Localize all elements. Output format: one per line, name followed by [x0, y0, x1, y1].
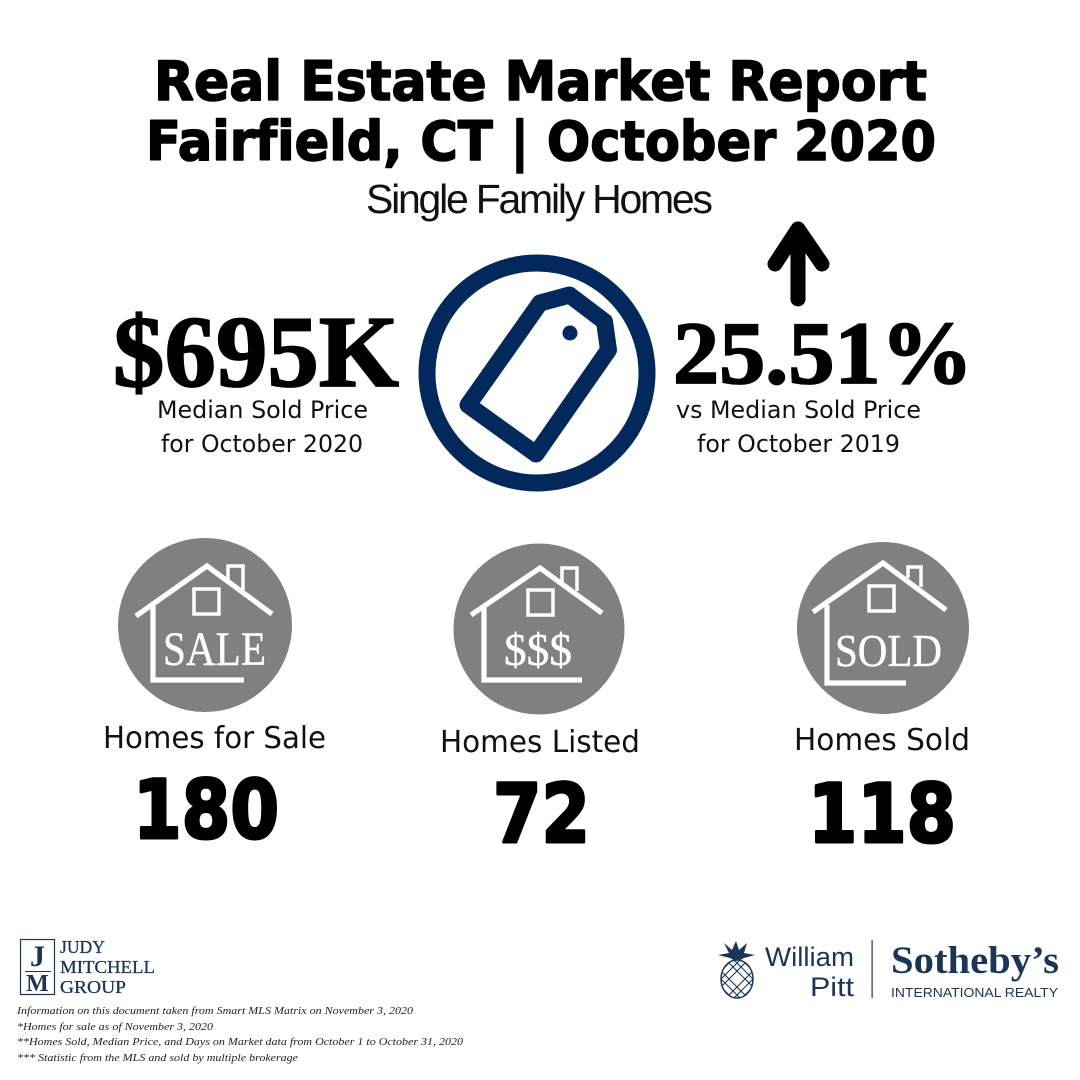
footnotes: *Homes for sale as of November 3, 2020	[17, 1021, 214, 1033]
arrow: up	[775, 229, 822, 299]
footnotes	[16, 1005, 464, 1064]
logo: Judy Mitchell Group: J	[30, 940, 45, 973]
stat: homes for sale	[103, 721, 326, 858]
logo: Judy Mitchell Group	[20, 937, 155, 997]
stat: year over year change: 25.51%	[673, 305, 973, 403]
logo: William Pitt: William	[765, 942, 854, 972]
subtitle: Single Family Homes	[366, 176, 713, 222]
logo: Judy Mitchell Group: GROUP	[60, 977, 126, 997]
logo: Judy Mitchell Group: MITCHELL	[60, 957, 155, 977]
icon: house listed	[454, 544, 624, 714]
stat: year over year change: vs Median Sold Price	[676, 396, 921, 424]
stat: homes sold	[794, 723, 970, 862]
stat: homes sold: 118	[808, 768, 956, 862]
icon: price tag in circle	[427, 263, 647, 483]
logo: William Pitt	[765, 942, 855, 1002]
icon: house sold	[797, 542, 969, 714]
stat: homes listed: 72	[493, 768, 590, 862]
stat: homes sold: Homes Sold	[794, 723, 970, 758]
logo: Sotheby's International Realty	[891, 939, 1059, 1000]
stat: homes listed	[440, 725, 640, 862]
logo: Judy Mitchell Group: M	[26, 971, 49, 997]
stat: homes for sale: 180	[133, 764, 279, 858]
logo: Judy Mitchell Group: JUDY	[60, 937, 105, 957]
title: Fairfield, CT | October 2020	[146, 110, 936, 173]
title: Real Estate Market Report	[154, 50, 927, 113]
stat: homes listed: Homes Listed	[440, 725, 640, 760]
title	[146, 50, 936, 173]
logo divider	[872, 940, 873, 998]
stat: year over year change: for October 2019	[697, 430, 900, 458]
stat: median sold price: for October 2020	[161, 430, 363, 458]
footnotes: Information on this document taken from Smart MLS Matrix on November 3, 2020	[16, 1005, 414, 1017]
logo: pineapple	[718, 941, 755, 999]
stat: median sold price: Median Sold Price	[157, 396, 368, 424]
stat: median sold price	[113, 296, 399, 458]
logo: William Pitt: Pitt	[810, 972, 855, 1002]
logo: Sotheby's International Realty: Sotheby’s	[891, 939, 1059, 982]
stat: homes for sale: Homes for Sale	[103, 721, 326, 756]
footnotes: **Homes Sold, Median Price, and Days on Market data from October 1 to October 31, 2020	[17, 1036, 464, 1048]
icon: house listed: $$$	[504, 624, 572, 675]
icon: house for sale: SALE	[163, 623, 266, 676]
footnotes: *** Statistic from the MLS and sold by multiple brokerage	[17, 1052, 298, 1064]
stat: year over year change	[673, 305, 973, 458]
icon: house sold: SOLD	[835, 625, 942, 676]
icon: house for sale	[118, 538, 292, 712]
stat: median sold price: $695K	[113, 296, 399, 409]
logo: Sotheby's International Realty: INTERNATIONAL REALTY	[891, 985, 1058, 1000]
